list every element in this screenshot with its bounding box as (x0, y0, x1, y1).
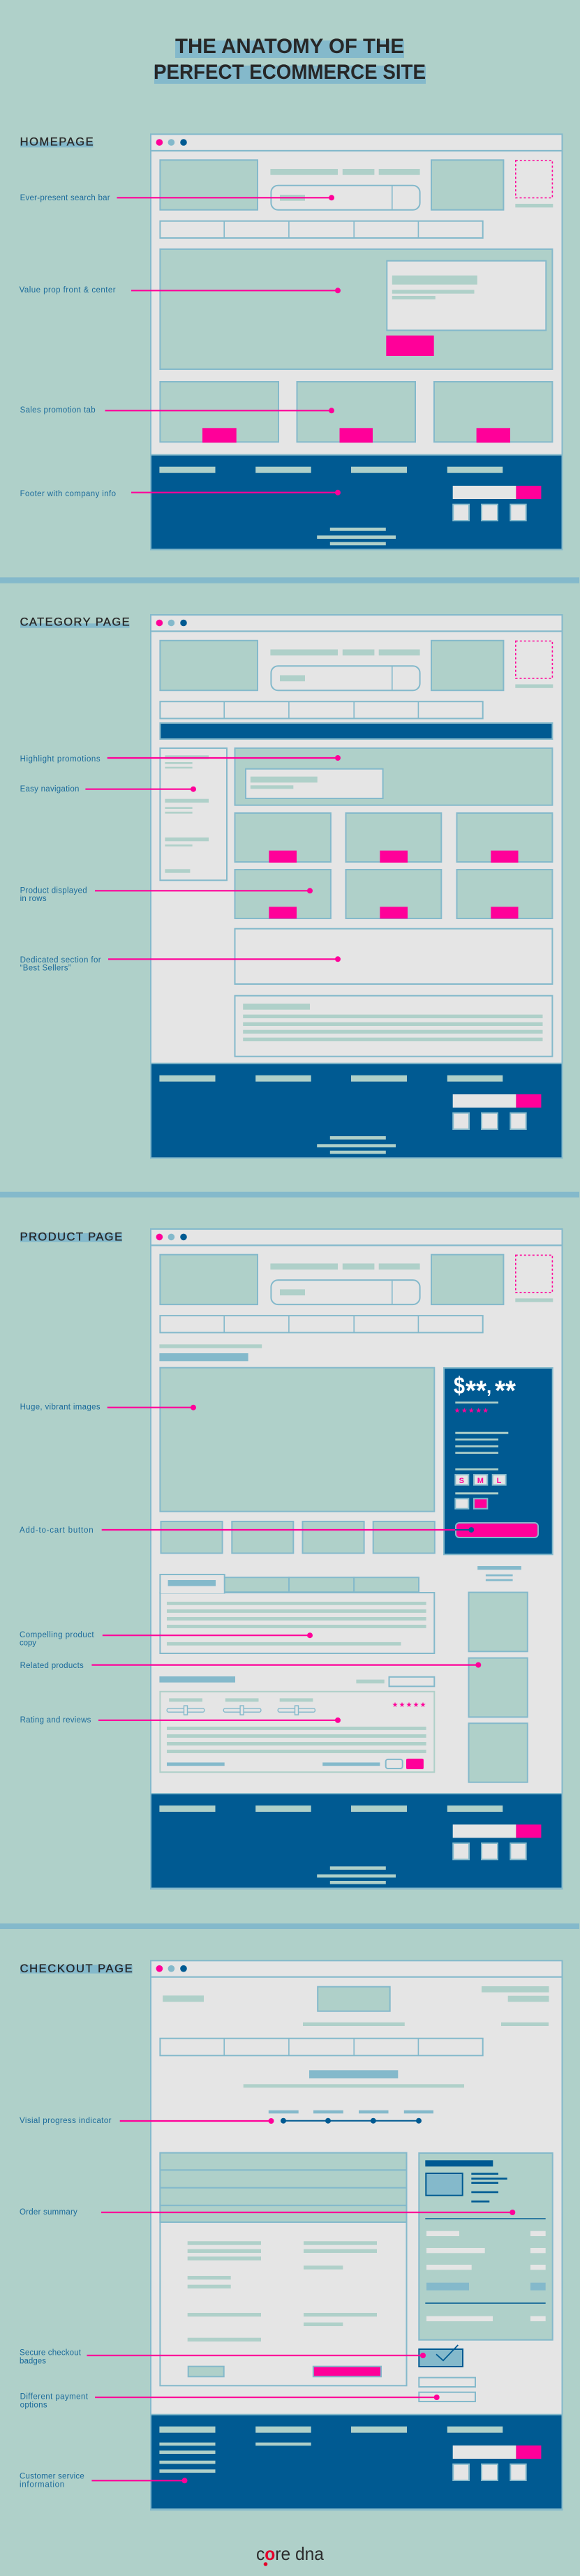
callout: products in rows: in rows (20, 895, 47, 903)
best sellers section (235, 929, 552, 984)
secure checkout badge (419, 2345, 463, 2367)
checkout header (160, 1986, 549, 2087)
callout: easy navigation (20, 785, 196, 794)
callout: add to cart (20, 1526, 474, 1535)
size selector (455, 1475, 506, 1485)
panel: product page (20, 1229, 563, 1889)
callout: best sellers: Dedicated section for (20, 956, 101, 965)
callout: order summary: Order summary (20, 2208, 77, 2217)
callout: product copy: Compelling product (20, 1631, 94, 1639)
callout: customer service: information (20, 2480, 64, 2489)
callout: search bar (20, 194, 334, 202)
callout: footer: Footer with company info (20, 490, 116, 498)
footer (151, 1794, 563, 1889)
callout: best sellers: “Best Sellers” (20, 965, 71, 973)
payment options (419, 2378, 475, 2402)
callout: products in rows: Product displayed (20, 886, 87, 895)
callout: product copy (20, 1631, 313, 1647)
browser window (151, 134, 563, 549)
callout: value prop (20, 286, 341, 295)
main product image (160, 1368, 434, 1512)
callout: sales promotion: Sales promotion tab (20, 406, 96, 415)
size selector: S (459, 1477, 464, 1485)
callout: footer (20, 490, 341, 498)
colour swatches (455, 1498, 487, 1509)
callout: progress indicator (20, 2117, 274, 2125)
callout: payment options: options (20, 2401, 47, 2409)
price: , (486, 1376, 491, 1397)
heading: product page: PRODUCT PAGE (20, 1231, 122, 1244)
site header (160, 641, 553, 719)
panel: checkout page (20, 1960, 563, 2510)
callout: progress indicator: Visial progress indicator (20, 2117, 112, 2125)
title: PERFECT ECOMMERCE SITE (154, 61, 426, 84)
heading: category page: CATEGORY PAGE (20, 616, 130, 629)
browser window (151, 615, 563, 1158)
site header (160, 160, 553, 238)
footer (151, 1064, 563, 1158)
price: ** (466, 1376, 486, 1406)
sidebar navigation (160, 748, 227, 880)
section divider (0, 1923, 579, 1929)
callout: easy navigation: Easy navigation (20, 785, 79, 794)
callout: highlight promotions: Highlight promotions (20, 755, 101, 764)
related products (469, 1566, 528, 1782)
callout: rating and reviews: Rating and reviews (20, 1716, 91, 1725)
callout: highlight promotions (20, 755, 341, 764)
heading: homepage: HOMEPAGE (20, 135, 94, 148)
progress indicator (269, 2110, 433, 2124)
reviews section (159, 1676, 434, 1772)
callout: value prop: Value prop front & center (20, 286, 116, 295)
footer (151, 2415, 563, 2509)
callout: product copy: copy (20, 1639, 36, 1647)
promotion banner (235, 748, 552, 805)
site header (160, 1255, 553, 1332)
checkout form (160, 2153, 406, 2385)
price panel (444, 1368, 553, 1554)
product description tabs (160, 1574, 434, 1653)
callout: huge images: Huge, vibrant images (20, 1403, 101, 1411)
callout: customer service: Customer service (20, 2472, 84, 2480)
price: $ (454, 1373, 465, 1399)
callout: payment options: Different payment (20, 2392, 89, 2401)
text block (235, 996, 552, 1057)
callout: sales promotion (20, 406, 334, 415)
callout: search bar: Ever-present search bar (20, 194, 110, 202)
callout: order summary (20, 2208, 515, 2217)
breadcrumb and product title (159, 1344, 262, 1361)
section divider (0, 577, 579, 583)
callout: customer service (20, 2472, 187, 2489)
hero with value proposition (160, 249, 552, 369)
browser window (151, 1960, 563, 2510)
add to cart button (456, 1523, 538, 1538)
promotion cards (160, 382, 552, 442)
callout: add to cart: Add-to-cart button (20, 1526, 94, 1535)
logo: core dna: core dna (256, 2543, 324, 2564)
rating stars (454, 1408, 489, 1413)
callout: related products: Related products (20, 1662, 84, 1670)
order summary (419, 2153, 553, 2340)
callout: payment options (20, 2392, 440, 2409)
title: THE ANATOMY OF THE (175, 35, 404, 58)
callout: huge images (20, 1403, 196, 1411)
review stars (392, 1702, 426, 1707)
browser window (151, 1229, 563, 1889)
size selector: M (477, 1477, 484, 1485)
footer (151, 455, 563, 549)
blue banner (160, 723, 552, 739)
price (454, 1373, 516, 1406)
title (154, 35, 426, 84)
callout: secure checkout badges: Secure checkout (20, 2349, 82, 2358)
panel: category page (20, 615, 563, 1158)
callout: best sellers (20, 956, 341, 973)
callout: secure checkout badges: badges (20, 2358, 46, 2366)
panel: homepage (20, 134, 563, 549)
product grid (235, 813, 552, 918)
callout: secure checkout badges (20, 2349, 426, 2366)
callout: rating and reviews (20, 1716, 341, 1725)
section divider (0, 1192, 579, 1198)
price: ** (495, 1376, 516, 1406)
sliders (167, 1706, 315, 1715)
callout: products in rows (20, 886, 313, 903)
thumbnails (161, 1521, 435, 1554)
heading: checkout page: CHECKOUT PAGE (20, 1963, 133, 1975)
callout: related products (20, 1662, 481, 1670)
size selector: L (497, 1477, 502, 1485)
